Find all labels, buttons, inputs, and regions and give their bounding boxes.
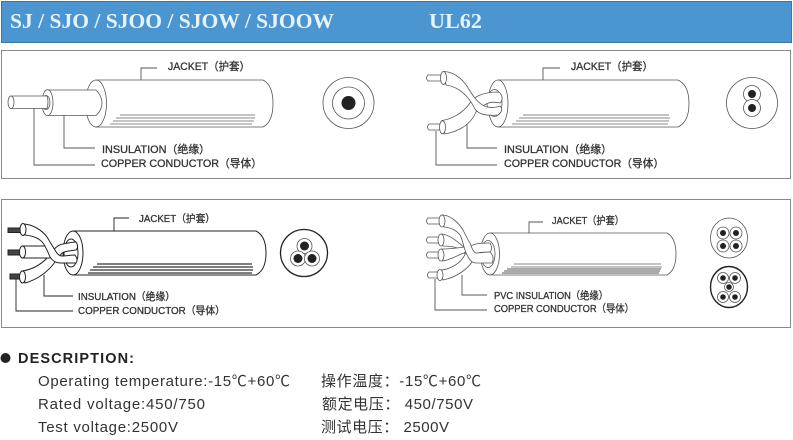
callout: conductor: COPPER CONDUCTOR（导体） xyxy=(78,305,225,317)
cable: single core xyxy=(8,80,273,127)
text block: Chinese specifications: 额定电压： 450/750V xyxy=(322,396,473,413)
heading: description: DESCRIPTION: xyxy=(18,351,134,367)
callout: jacket: JACKET（护套） xyxy=(552,214,624,227)
callout: insulation: INSULATION（绝缘） xyxy=(78,290,175,303)
text block: English specifications xyxy=(38,373,290,436)
callout: jacket xyxy=(543,59,653,80)
cable: two core xyxy=(426,72,689,134)
text block: Chinese specifications xyxy=(321,373,481,436)
cross-section: single core xyxy=(323,78,374,128)
callout: insulation: PVC INSULATION（绝缘） xyxy=(494,289,608,302)
text block: Chinese specifications: 测试电压： 2500V xyxy=(321,419,449,436)
callout: conductor xyxy=(16,279,225,317)
callout: jacket xyxy=(114,212,215,231)
callout: conductor xyxy=(34,108,262,170)
callout: jacket: JACKET（护套） xyxy=(168,59,250,73)
title banner: SJ / SJO / SJOO / SJOW / SJOOW xyxy=(10,9,334,33)
text block: English specifications: Test voltage:2500V xyxy=(38,419,178,436)
callout: insulation xyxy=(64,115,210,156)
callout: jacket: JACKET（护套） xyxy=(571,59,653,73)
title banner xyxy=(2,2,792,42)
cross-section: five core xyxy=(710,266,748,308)
callout: jacket xyxy=(529,214,624,233)
callout: jacket: JACKET（护套） xyxy=(139,212,215,225)
text block: English specifications: Rated voltage:450/750 xyxy=(38,396,205,413)
cross-section: four core xyxy=(710,218,748,258)
callout: insulation: INSULATION（绝缘） xyxy=(504,142,612,156)
text block: Chinese specifications: 操作温度：-15℃+60℃ xyxy=(321,373,481,390)
cable: four core xyxy=(426,215,676,280)
text block: English specifications: Operating temperature:-15℃+60℃ xyxy=(38,373,290,390)
callout: insulation xyxy=(44,275,175,303)
callout: jacket xyxy=(141,59,250,80)
callout: insulation xyxy=(462,275,608,302)
callout: conductor: COPPER CONDUCTOR（导体） xyxy=(504,156,664,170)
cross-section: two core xyxy=(726,78,778,128)
panel: top row xyxy=(2,50,790,178)
title banner: UL62 xyxy=(429,9,482,33)
cross-section: three core xyxy=(280,230,328,276)
callout: conductor xyxy=(435,279,634,315)
cable: three core xyxy=(8,224,266,283)
callout: insulation xyxy=(467,124,612,156)
callout: conductor: COPPER CONDUCTOR（导体） xyxy=(494,303,634,315)
panel: bottom row xyxy=(2,200,790,328)
callout: conductor xyxy=(436,131,664,170)
callout: insulation: INSULATION（绝缘） xyxy=(102,142,210,156)
callout: conductor: COPPER CONDUCTOR（导体） xyxy=(101,156,262,170)
